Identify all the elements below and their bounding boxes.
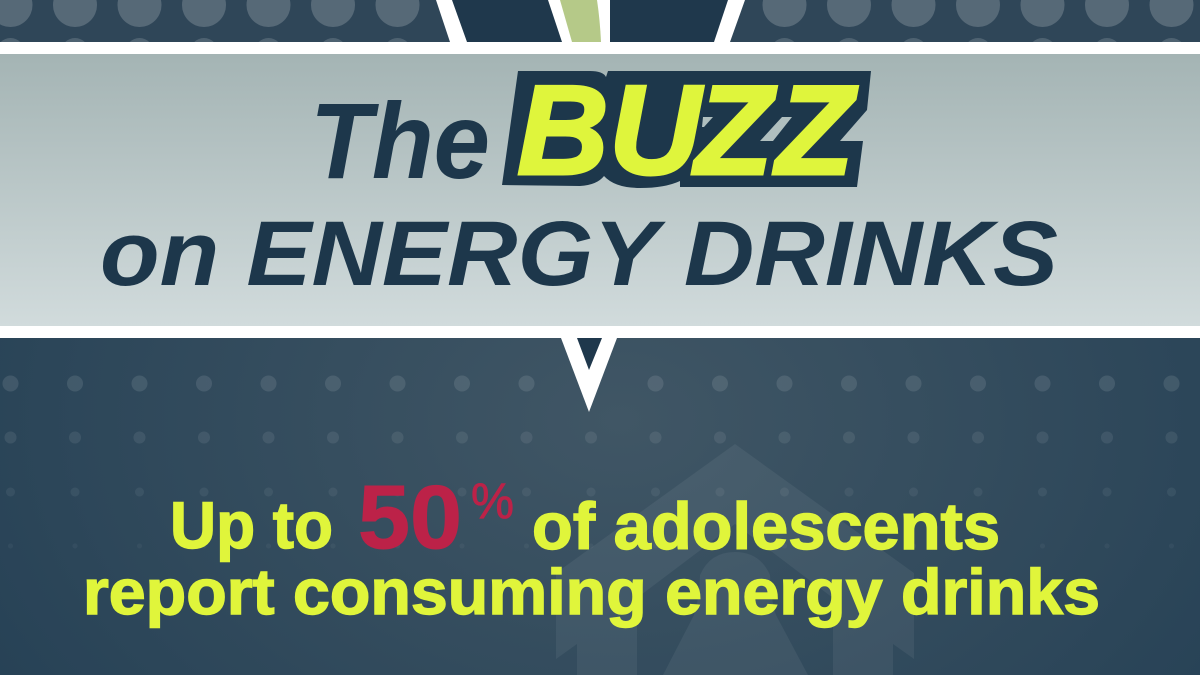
title word: The: The	[310, 80, 490, 201]
text: Up to: Up to	[170, 488, 333, 562]
panel: top strip	[0, 0, 1200, 42]
icon: faint upward arrows	[556, 444, 914, 675]
title line: on ENERGY DRINKS: on ENERGY DRINKS	[100, 203, 1058, 305]
text: report consuming energy drinks: report consuming energy drinks	[83, 556, 1100, 628]
panel: title band	[0, 42, 1200, 338]
icon: top triangle pointer	[436, 0, 745, 42]
text: 50: 50	[358, 468, 462, 568]
title word: BUZZ: BUZZ	[517, 59, 858, 201]
title	[100, 59, 1058, 305]
icon: bottom triangle pointer	[561, 338, 617, 412]
text: of adolescents: of adolescents	[532, 489, 1000, 563]
text: percent sign: %	[471, 473, 514, 529]
panel: lower background	[0, 338, 1200, 675]
statistic text	[83, 468, 1100, 628]
